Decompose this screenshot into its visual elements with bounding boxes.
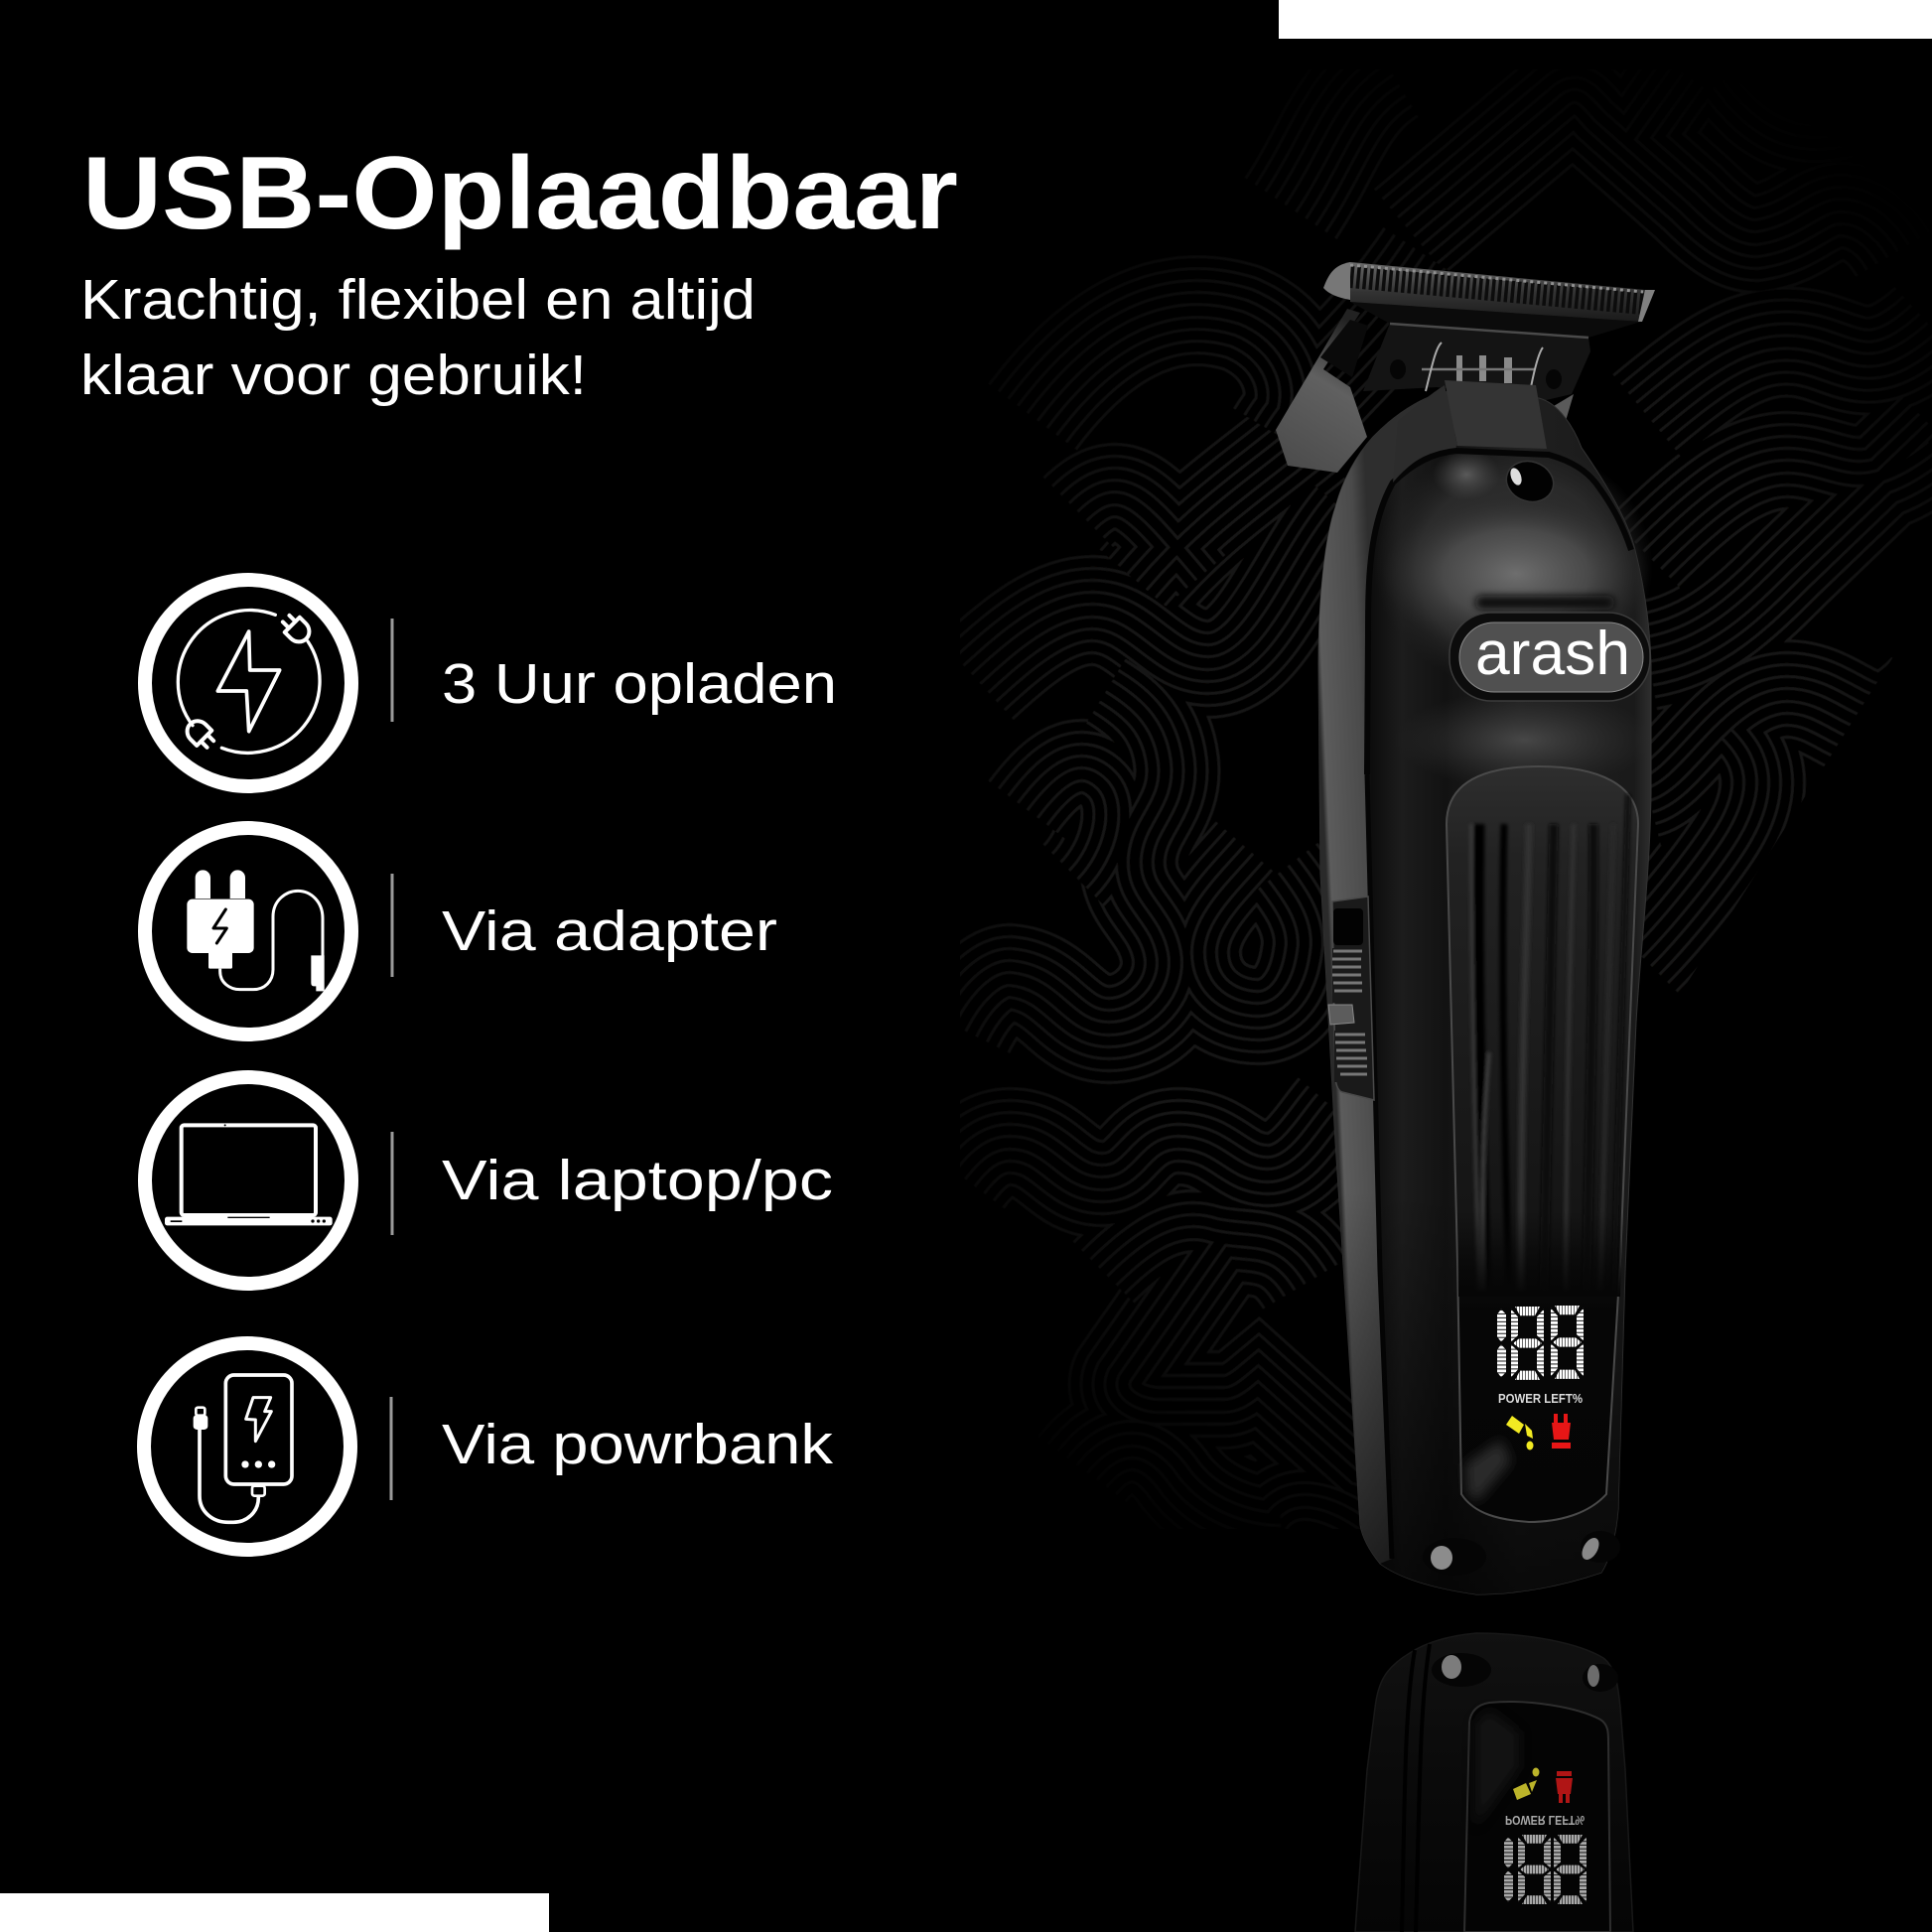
power left label: POWER LEFT% <box>1498 1391 1583 1406</box>
label: via laptop/pc: Via laptop/pc <box>442 1149 833 1212</box>
item: via laptop/pc <box>145 1077 833 1284</box>
reflected display panel <box>1464 1702 1610 1932</box>
reflected power left text: POWER LEFT% <box>1505 1813 1585 1828</box>
screws <box>1423 1531 1620 1576</box>
subtitle <box>80 268 756 407</box>
item: via powerbank <box>144 1343 834 1550</box>
slider ribs upper <box>1332 948 1364 1003</box>
reflected screws <box>1432 1653 1618 1692</box>
left lit strip <box>1318 391 1456 1564</box>
lower panel <box>1447 766 1638 1522</box>
trimmer <box>1276 262 1655 1594</box>
dark band above badge <box>1475 596 1614 610</box>
reflected glare <box>1475 1710 1519 1827</box>
reflection of trimmer <box>1355 1633 1633 1932</box>
glow: top face <box>1382 494 1650 653</box>
right guard <box>1549 394 1574 421</box>
white bar top right <box>1279 0 1932 39</box>
divider <box>391 619 393 722</box>
title: USB-Oplaadbaar <box>82 136 958 251</box>
reflected seam lines <box>1402 1644 1430 1932</box>
slider knob <box>1328 1005 1354 1025</box>
blade shadow under teeth <box>1350 302 1641 338</box>
brand badge <box>1449 613 1650 701</box>
white bar bottom left <box>0 1893 549 1932</box>
label: via powrbank: Via powrbank <box>442 1413 834 1476</box>
label: via adapter: Via adapter <box>442 899 777 963</box>
glow: lower face <box>1395 690 1653 789</box>
body bottom shade <box>1335 1142 1636 1594</box>
neck trapezoid <box>1445 380 1547 449</box>
yellow indicator <box>1506 1416 1533 1449</box>
neck shoulders <box>1393 385 1457 483</box>
divider <box>389 1397 393 1500</box>
body <box>1318 391 1651 1594</box>
divider <box>391 1132 393 1235</box>
slider ribs lower <box>1334 1031 1368 1082</box>
ridge fade into screen <box>1457 1211 1622 1297</box>
reflected body <box>1355 1633 1633 1932</box>
item: via adapter <box>145 828 777 1035</box>
icon: laptop <box>145 1077 351 1284</box>
label: 3 uur opladen: 3 Uur opladen <box>442 652 837 716</box>
background pattern: woven wave lines <box>960 69 1932 1529</box>
subtitle: klaar voor gebruik! <box>80 344 587 407</box>
button hole <box>1501 456 1559 507</box>
blade <box>1323 262 1655 322</box>
subtitle: Krachtig, flexibel en altijd <box>80 268 756 332</box>
reflected digits <box>1504 1835 1587 1904</box>
reflected LEDs <box>1513 1767 1573 1803</box>
icon: charging cable circle with bolt <box>145 580 351 786</box>
lower seam <box>1367 774 1392 1559</box>
brand name: arash <box>1475 620 1630 688</box>
side switch <box>1328 897 1374 1100</box>
glow: top spot <box>1433 449 1500 500</box>
blade holder <box>1363 324 1590 401</box>
display digits 188 <box>1497 1306 1584 1380</box>
body seam <box>1367 451 1631 774</box>
divider <box>391 874 393 977</box>
rear guard <box>1276 309 1367 473</box>
icon: adapter plug with cable <box>145 828 351 1035</box>
glow: inner face base <box>1375 442 1653 690</box>
icon: power bank with cable <box>144 1343 350 1550</box>
red plug indicator <box>1552 1414 1571 1449</box>
lcd glare <box>1465 1440 1511 1501</box>
panel ridges <box>1471 794 1628 1291</box>
item: 3 uur opladen <box>145 580 837 786</box>
